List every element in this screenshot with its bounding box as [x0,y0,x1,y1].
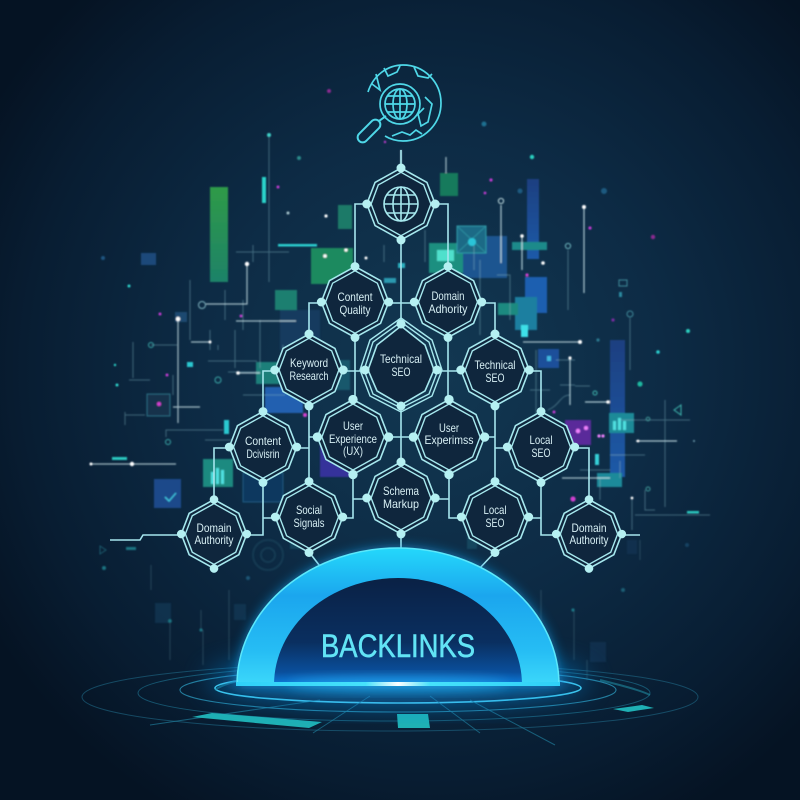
node: Social Signals: Signals [294,516,324,530]
node: Local SEO lower: SEO [486,516,504,530]
connector network [110,150,640,570]
dome [208,548,588,704]
node: Domain Authority top: Adhority [428,302,468,316]
node: Content Quality [317,262,393,342]
node: Social Signals: Social [296,503,322,517]
node: Content Division [225,407,301,487]
dome label: BACKLINKS [321,628,475,664]
node: Technical SEO right [456,330,534,410]
node: Content Quality: Content [338,290,373,304]
node: User Experience (UX): (UX) [343,444,363,458]
node: Social Signals [271,477,347,557]
node: User Experience (UX) [313,395,393,479]
node: Schema Markup: Markup [383,497,419,511]
node: Local SEO upper: SEO [532,446,550,460]
node: Local SEO lower [457,477,533,557]
node: Local SEO upper [503,407,579,487]
node: Local SEO lower: Local [484,503,506,517]
node: Domain Authority top: Domain [432,289,464,303]
node: User Experimss [409,395,489,479]
base rings [82,663,698,745]
node: Content Quality: Quality [340,303,370,317]
node: User Experimss: User [439,421,459,435]
node: Schema Markup: Schema [383,484,419,498]
node: User Experience (UX): User [343,419,363,433]
node: Domain Authority right: Authority [570,533,608,547]
node: Domain Authority left: Domain [196,521,232,535]
node: globe [362,164,440,244]
node: Technical SEO center: Technical [380,352,422,366]
node: Domain Authority right: Domain [572,521,606,535]
teal base panels [192,705,654,728]
search globe icon [356,65,441,144]
node: Local SEO upper: Local [530,433,552,447]
node: User Experimss: Experimss [424,433,474,447]
node: User Experience (UX): Experience [329,432,377,446]
data blocks and circuit lines, right [384,122,710,530]
data blocks and circuit lines, left [90,89,368,508]
node: Technical SEO center: SEO [392,365,410,379]
node: Technical SEO center [360,318,442,412]
lower faint data elements [100,535,689,680]
node: Keyword Research [270,330,348,410]
node: Domain Authority left [177,495,251,573]
node: Content Division: Content [245,434,282,448]
node: Technical SEO right: Technical [474,358,516,372]
node: Keyword Research: Keyword [290,356,328,370]
node: Content Division: Dcivisrin [246,447,280,461]
node: Schema Markup [362,458,440,538]
node: Domain Authority right [552,495,626,573]
node: Technical SEO right: SEO [486,371,504,385]
node: Keyword Research: Research [290,369,328,383]
node: Domain Authority left: Authority [194,533,234,547]
node: Domain Authority top [410,262,486,342]
